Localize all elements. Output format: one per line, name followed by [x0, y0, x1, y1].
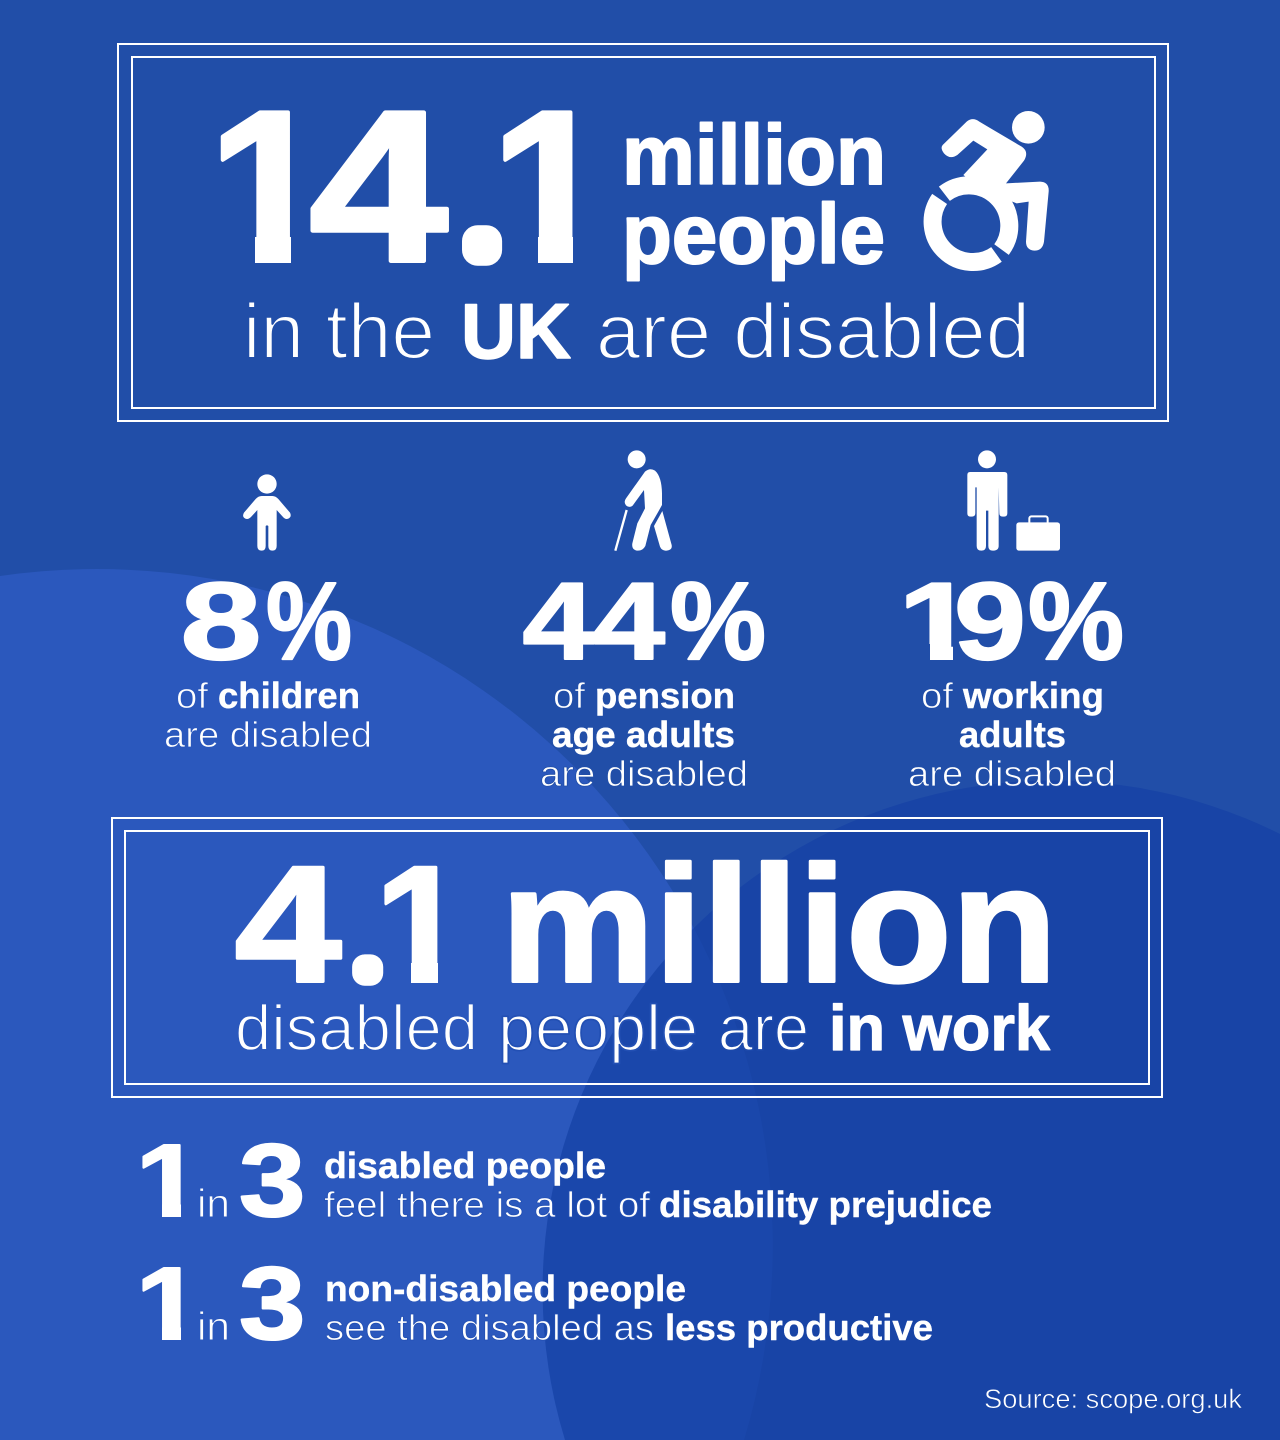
label: of working adults are disabled: of — [921, 675, 954, 716]
label: of working adults are disabled: adults — [959, 714, 1066, 755]
panel: children statistic — [164, 474, 372, 755]
source note: Source: scope.org.uk — [984, 1384, 1242, 1414]
big number 14.1: 1 — [490, 65, 610, 307]
panel: pension age statistic — [522, 450, 766, 794]
big number 14.1: 4 — [309, 65, 448, 307]
big number: 4.1 million: 4 — [235, 832, 342, 1018]
number: 44%: % — [670, 560, 766, 683]
number: 19%: 9 — [954, 560, 1026, 683]
label: of pension age adults are disabled — [540, 675, 748, 794]
panel: working adults statistic — [898, 450, 1124, 794]
text: in the UK are disabled: are disabled — [596, 287, 1030, 375]
label: of children are disabled: of — [176, 675, 209, 716]
heading: million people: people — [622, 187, 885, 281]
text: disabled people feel prejudice: feel there is a lot of — [324, 1184, 651, 1225]
ratio: 1 in 3: 1 — [136, 1123, 202, 1238]
text: non-disabled people see less productive: see the disabled as — [325, 1307, 654, 1348]
label: of children are disabled — [164, 675, 372, 755]
label: of children are disabled: children — [218, 675, 360, 716]
number: 19% — [906, 581, 1122, 662]
heading: million people — [622, 108, 886, 281]
text: disabled people feel prejudice — [324, 1145, 992, 1225]
ratio: 1 in 3: 3 — [239, 1246, 305, 1361]
big number 14.1 — [220, 110, 573, 266]
number: 44%: 4 — [593, 560, 665, 683]
label: of working adults are disabled: are disabled — [908, 753, 1116, 794]
ratio: 1 in 3: 3 — [239, 1123, 305, 1238]
icon: person with briefcase — [967, 450, 1060, 551]
ratio: 1 in 3 — [142, 1266, 302, 1341]
ratio: 1 in 3: in — [197, 1305, 230, 1349]
text: in the UK are disabled — [243, 287, 1030, 375]
label: of pension age adults are disabled: are disabled — [540, 753, 748, 794]
icon: older person with cane — [615, 450, 672, 551]
number: 19%: % — [1028, 560, 1124, 683]
number: 8% — [180, 560, 352, 683]
label: of working adults are disabled — [908, 675, 1116, 794]
big number: 4.1 million — [236, 860, 1048, 986]
text: disabled people feel prejudice: disabled people — [324, 1145, 606, 1186]
label: of children are disabled: are disabled — [164, 714, 372, 755]
label: of pension age adults are disabled: pension — [595, 675, 735, 716]
big number 14.1: . — [474, 196, 490, 263]
panel: 4.1 million in work — [112, 818, 1162, 1097]
text: disabled people are in work: in work — [829, 992, 1050, 1064]
number: 19%: 1 — [898, 560, 976, 683]
label: of working adults are disabled: working — [962, 675, 1104, 716]
text: in the UK are disabled: in the — [243, 287, 435, 375]
text: in the UK are disabled: UK — [461, 287, 571, 375]
big number: 4.1 million: 1 — [375, 832, 467, 1018]
text: non-disabled people see less productive — [325, 1268, 933, 1348]
panel: 14.1 million headline — [118, 44, 1168, 421]
text: disabled people feel prejudice: disability prejudice — [659, 1184, 992, 1225]
ratio: 1 in 3: in — [197, 1182, 230, 1226]
number: 8%: 8 — [180, 560, 262, 683]
icon: wheelchair — [933, 111, 1049, 262]
ratio: 1 in 3 — [142, 1142, 302, 1218]
heading: million people: million — [622, 108, 886, 202]
text: disabled people are in work: disabled — [235, 992, 478, 1064]
label: of pension age adults are disabled: age adults — [552, 714, 735, 755]
big number: 4.1 million: . — [362, 938, 373, 982]
text: disabled people are in work — [235, 992, 1050, 1064]
big number 14.1: 1 — [208, 65, 328, 307]
statistic: 1 in 3 less productive — [142, 1266, 932, 1348]
text: non-disabled people see less productive: less productive — [665, 1307, 933, 1348]
big number: 4.1 million: million — [501, 832, 1057, 1018]
number: 44% — [522, 560, 766, 683]
icon: child — [243, 474, 291, 551]
number: 8%: % — [266, 560, 352, 683]
statistic: 1 in 3 disability prejudice — [142, 1142, 991, 1225]
number: 44%: 4 — [522, 560, 594, 683]
text: non-disabled people see less productive: non-disabled people — [325, 1268, 686, 1309]
text: disabled people are in work: are — [718, 992, 809, 1064]
ratio: 1 in 3: 1 — [136, 1246, 202, 1361]
label: of pension age adults are disabled: of — [553, 675, 586, 716]
text: disabled people are in work: people — [498, 992, 698, 1064]
